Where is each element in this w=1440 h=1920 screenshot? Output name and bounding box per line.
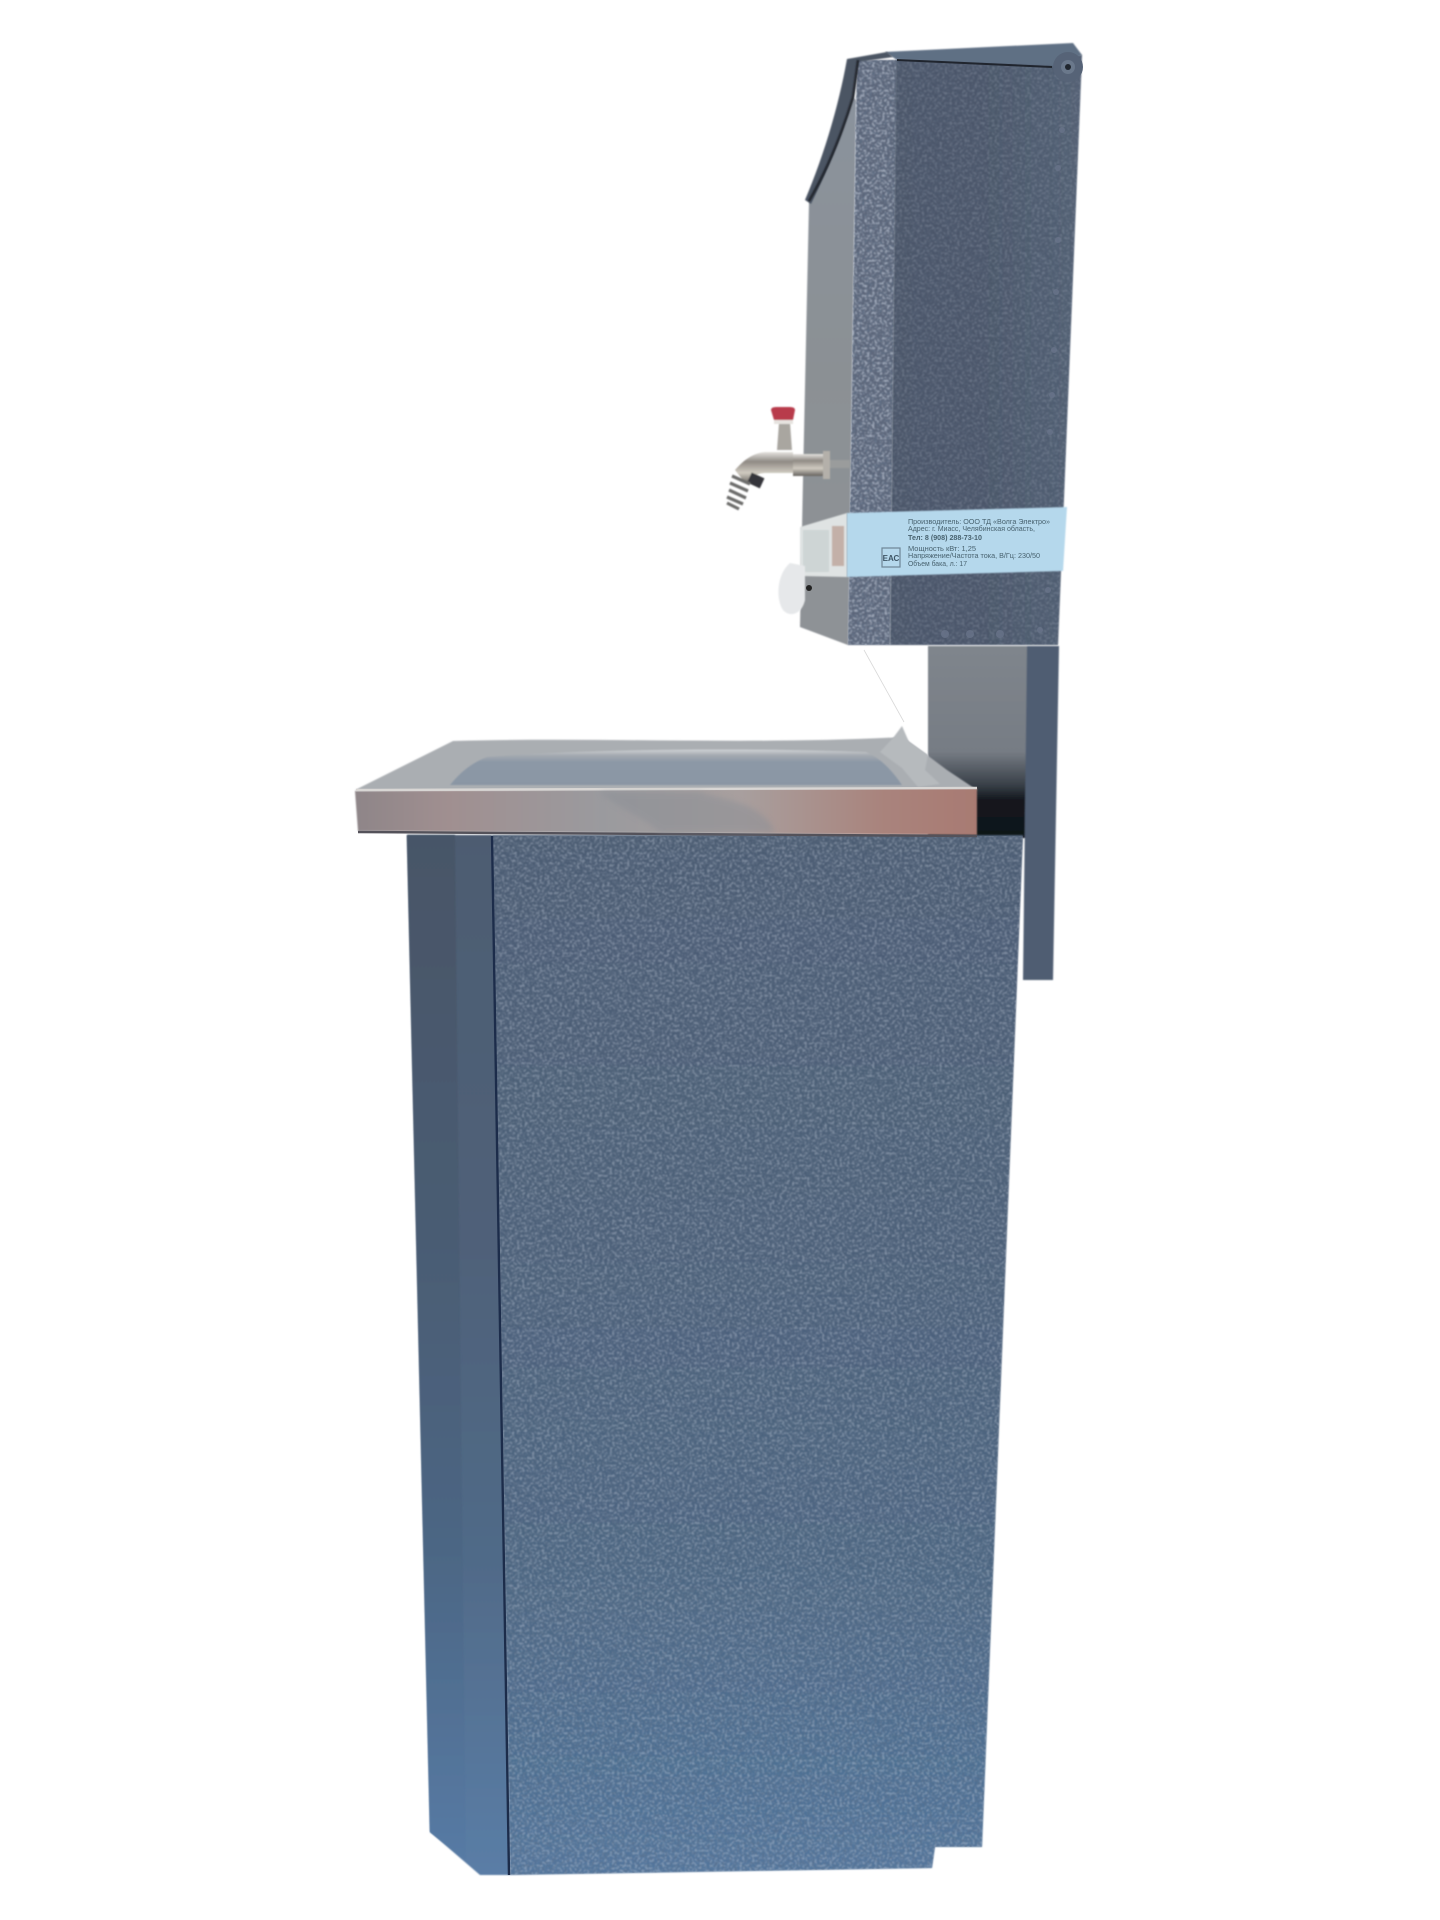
- tank lid slanted edge: [805, 52, 893, 204]
- rear support post: [928, 646, 1059, 980]
- steel sink: [355, 726, 977, 836]
- cabinet door panel: [492, 835, 1023, 1875]
- label text: [908, 517, 1050, 568]
- tape and float under label: [778, 513, 847, 614]
- pipe shadow on tank side: [830, 460, 850, 468]
- faucet stem and handle: [777, 423, 792, 450]
- tank lid front band: [885, 43, 1082, 66]
- label background: [847, 507, 1067, 577]
- sink top rim: [355, 737, 977, 790]
- sink basin: [450, 749, 902, 785]
- label text: Адрес: г. Миасс, Челябинская область,: [908, 524, 1035, 533]
- smudge on sink front: [600, 792, 775, 832]
- faucet spout: [735, 452, 793, 484]
- faucet: [727, 407, 850, 509]
- drain channel: [880, 726, 940, 787]
- product illustration: washbasin cabinet side view: [354, 42, 1083, 1876]
- cabinet body: [407, 835, 1030, 1880]
- sink front edge: [355, 788, 977, 835]
- tank corner bevel: [848, 60, 897, 645]
- product label: [847, 507, 1067, 577]
- lid hinge bolt: [1053, 52, 1083, 82]
- label text: Производитель: ООО ТД «Волга Электро»: [908, 517, 1050, 526]
- clear tape: [800, 513, 847, 577]
- rivets along tank edge: [941, 127, 1065, 638]
- label text: Напряжение/Частота тока, В/Гц: 230/50: [908, 551, 1040, 560]
- EAC mark: ЕАС: [883, 554, 900, 563]
- float ball: [778, 563, 805, 614]
- cabinet side panel: [407, 835, 466, 1860]
- fine wire from tank to sink: [864, 650, 904, 722]
- label text: Объем бака, л.: 17: [908, 559, 967, 568]
- door seam: [492, 836, 509, 1875]
- door texture: [490, 835, 1030, 1880]
- cabinet corner bevel: [407, 835, 510, 1875]
- tank front: [890, 55, 1082, 645]
- pipe connector: [793, 454, 827, 476]
- tank side: [800, 97, 856, 645]
- clip on spout: [747, 473, 764, 488]
- EAC mark: [882, 548, 900, 567]
- label text: Мощность кВт: 1,25: [908, 544, 976, 553]
- float screw: [806, 585, 812, 591]
- label text: Тел: 8 (908) 288-73-10: [908, 533, 982, 542]
- water tank: [800, 43, 1084, 648]
- faucet tip spring: [727, 476, 750, 509]
